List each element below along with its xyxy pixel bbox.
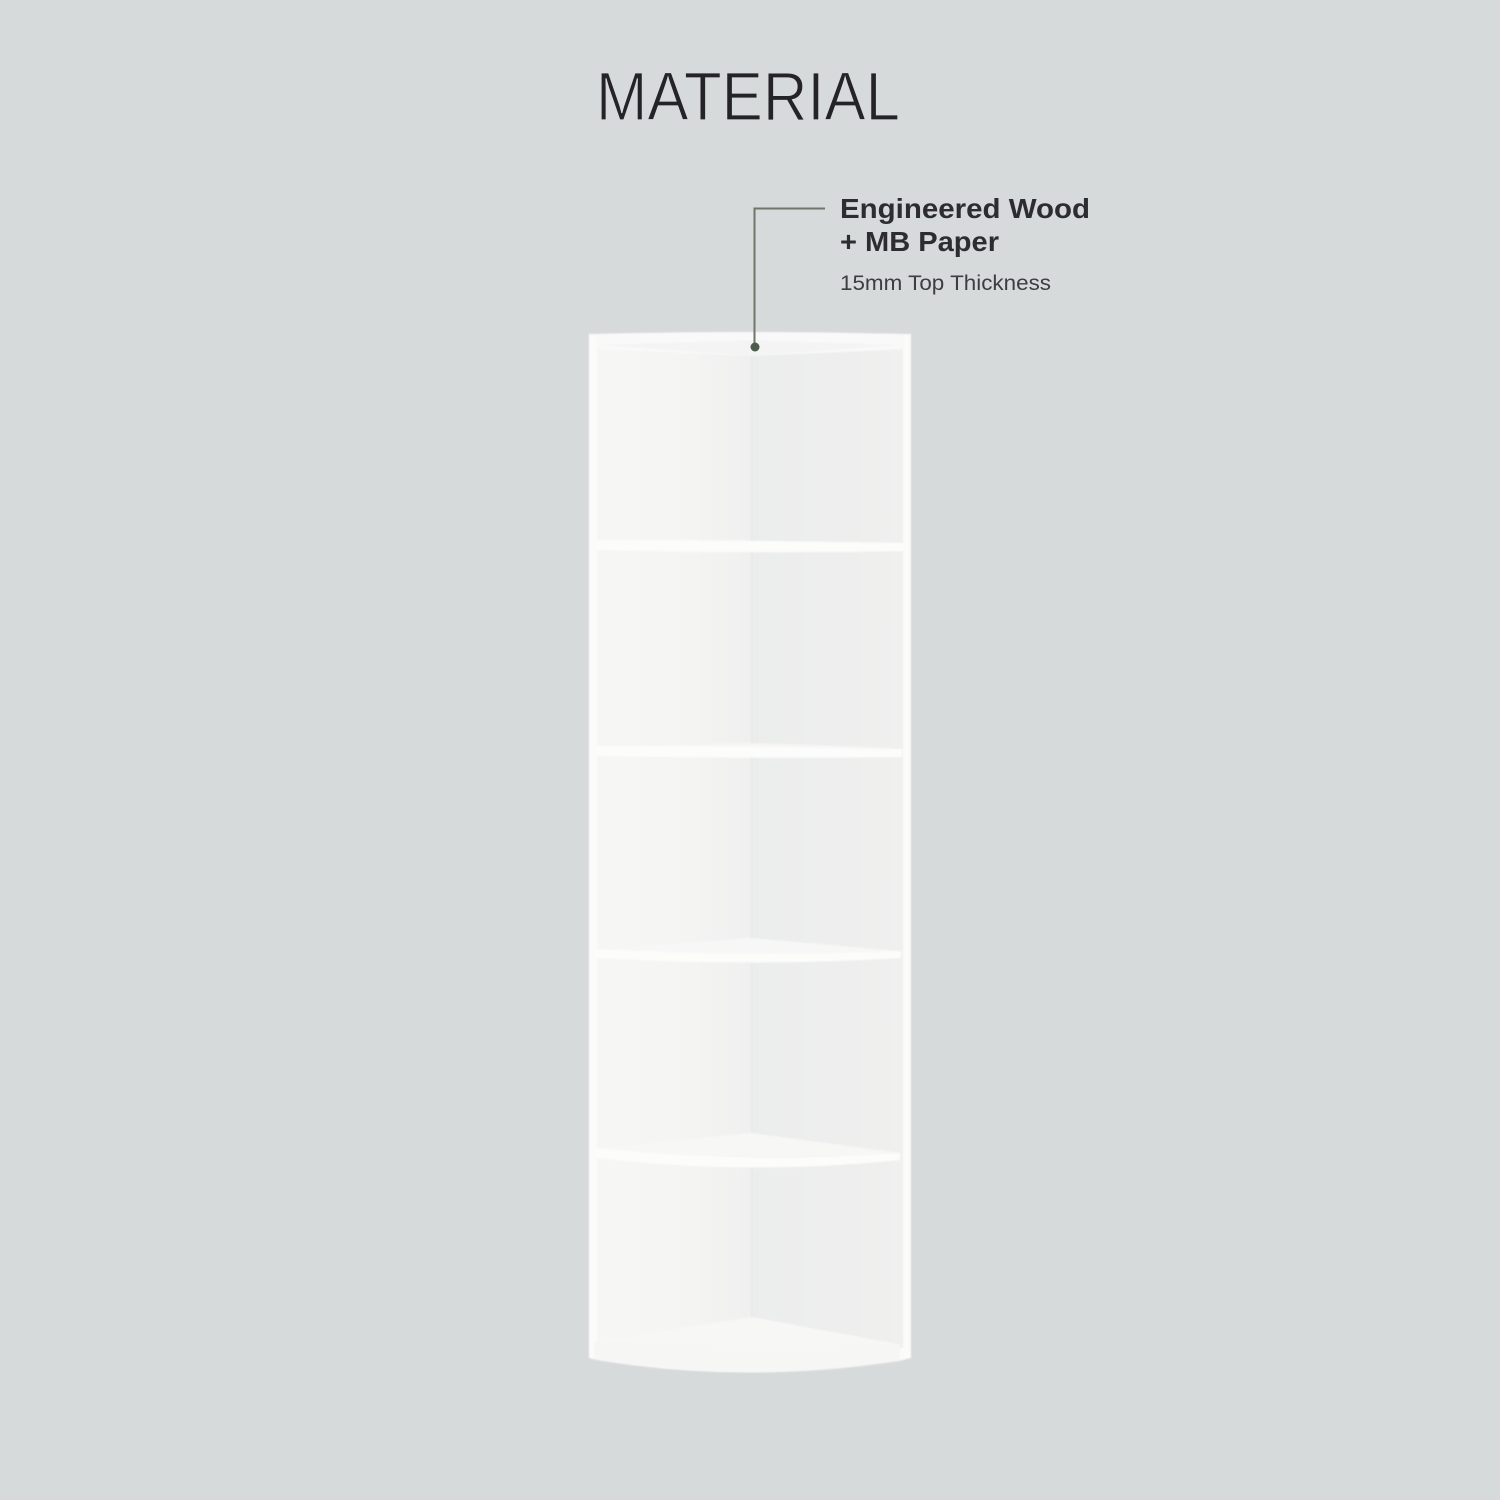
back wall: left bbox=[597, 348, 752, 1348]
corner seam bbox=[751, 350, 752, 1318]
shelf 3 bbox=[595, 938, 901, 962]
callout detail: 15mm Top Thickness bbox=[840, 272, 1051, 295]
shelf 2 surface bbox=[597, 743, 903, 748]
title: MATERIAL bbox=[596, 58, 900, 135]
callout heading: Engineered Wood bbox=[840, 193, 1090, 224]
leader dot bbox=[750, 342, 760, 352]
leader line bbox=[754, 208, 825, 347]
shelf 2 front edge bbox=[596, 746, 902, 758]
corner shelf unit bbox=[589, 332, 911, 1372]
shelf 1 front edge bbox=[596, 540, 903, 552]
back wall: right bbox=[752, 348, 903, 1348]
shelf 2 bbox=[596, 743, 903, 758]
shelf 3 surface bbox=[596, 938, 900, 954]
outer frame bbox=[589, 334, 911, 1372]
top board bbox=[595, 332, 905, 356]
callout bbox=[750, 193, 1090, 352]
bottom board front bbox=[594, 1342, 900, 1371]
shelf 3 front edge bbox=[595, 949, 901, 962]
callout heading line 2: + MB Paper bbox=[840, 226, 999, 257]
bottom board surface bbox=[596, 1317, 898, 1372]
shelf 1 bbox=[596, 540, 903, 552]
shelf 4 surface bbox=[596, 1133, 900, 1157]
top board underside bbox=[597, 340, 903, 356]
shelf 4 bbox=[595, 1133, 900, 1168]
shelf 4 front edge bbox=[595, 1148, 900, 1168]
bottom board bbox=[594, 1317, 900, 1372]
